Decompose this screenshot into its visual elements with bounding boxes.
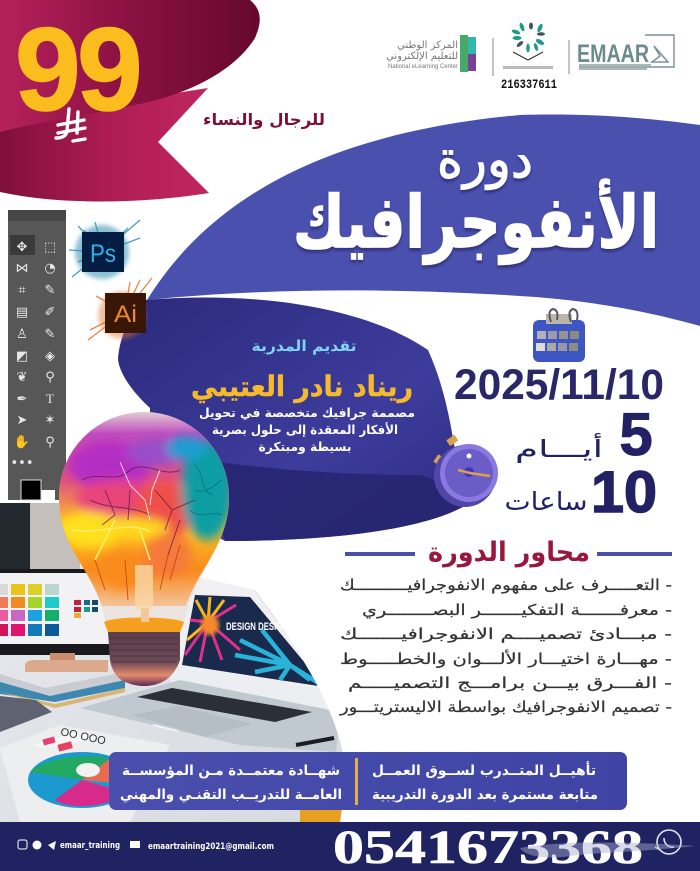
panel: tools palette: ❦ <box>17 370 27 385</box>
panel: tools palette: ✶ <box>45 413 55 428</box>
panel: tools palette: ◈ <box>45 349 55 364</box>
notebook with colour wheel <box>0 725 170 822</box>
icon: stopwatch <box>433 435 498 507</box>
icon: riyal symbol <box>56 109 85 141</box>
section heading: محاور الدورة <box>428 537 590 568</box>
footer contact: emaartraining2021@gmail.com <box>148 842 274 852</box>
panel: trainer <box>118 297 463 541</box>
duration hours <box>504 460 657 525</box>
icon: Illustrator <box>88 278 152 340</box>
panel: tools palette <box>8 210 66 502</box>
notebook with colour wheel: OO OOO <box>59 726 107 748</box>
trainer bio: بسيطة ومبتكرة <box>258 439 352 454</box>
trainer bio: مصممة جرافيك متخصصة في تحويل <box>199 405 415 420</box>
panel: tools palette: ✒ <box>17 392 27 407</box>
trainer bio <box>199 405 415 454</box>
duration hours: 10 <box>591 460 657 525</box>
icon: Photoshop <box>69 220 140 279</box>
audience text: للرجال والنساء <box>203 110 325 129</box>
panel: tools palette: ✎ <box>45 327 55 342</box>
section heading <box>345 537 672 568</box>
panel: tools palette: ◔ <box>44 261 56 276</box>
logo: national eLearning center: National eLearning Center <box>388 64 458 70</box>
footer contact <box>18 840 274 852</box>
poster <box>178 578 318 688</box>
panel: tools palette: ⋈ <box>16 261 28 276</box>
date: 2025/11/10 <box>454 361 664 409</box>
panel: title swoosh <box>147 115 700 326</box>
panel: tools palette: ✋ <box>14 434 30 450</box>
benefits right <box>372 761 598 803</box>
logo: national eLearning center: المركز الوطني <box>397 40 458 51</box>
duration days: 5 <box>619 401 653 468</box>
icon: calendar <box>533 309 585 362</box>
benefits right: متابعة مستمرة بعد الدورة التدريبية <box>372 787 598 803</box>
watermark <box>520 842 695 858</box>
course topics list <box>339 576 672 716</box>
panel: tools palette: T <box>46 391 54 406</box>
course topics list: - الفـــرق بيـــن برامـــج التصميـــــم <box>348 674 672 692</box>
panel: tools palette: ⌗ <box>18 283 26 298</box>
footer bar <box>0 822 700 871</box>
logo: national eLearning center: للتعليم الإلكتروني <box>386 51 458 62</box>
benefits left: شهــادة معتمــدة مـن المؤسســة <box>122 763 340 779</box>
trainer label: تقديم المدربة <box>252 337 356 355</box>
duration days <box>515 401 653 468</box>
panel: tools palette: ⚲ <box>45 435 55 450</box>
logo: EMAAR: EMAAR <box>577 40 649 68</box>
duration hours: ساعات <box>504 487 588 516</box>
illustration: brain light bulb <box>55 410 235 686</box>
course topics list: - مبـــادئ تصميــــم الانفوجرافيـــــــك <box>340 625 672 643</box>
laptop <box>80 664 340 752</box>
panel: tools palette: ⚲ <box>45 370 55 385</box>
logo: national eLearning center <box>386 35 476 72</box>
panel: tools palette: ✥ <box>17 240 28 255</box>
stack of devices <box>0 696 52 732</box>
duration days: أيـــام <box>515 433 603 463</box>
photo: design desk scene <box>0 500 350 830</box>
panel: tools palette: ➤ <box>17 413 28 428</box>
monitor <box>0 569 112 672</box>
course topics list: - تصميم الانفوجرافيك بواسطة الاليستريتـــور <box>339 698 672 716</box>
books <box>0 672 125 708</box>
logo: TVTC emblem with licence number <box>493 22 569 92</box>
panel: tools palette: ✎ <box>45 283 55 298</box>
trainer bio: الأفكار المعقدة إلى حلول بصرية <box>212 422 398 437</box>
panel: benefits box <box>109 752 627 810</box>
price number: 99 <box>15 4 143 136</box>
icon: whatsapp <box>655 830 681 854</box>
trainer name: ريناد نادر العتيبي <box>191 370 413 403</box>
panel: tools palette: ⬚ <box>44 240 56 255</box>
panel: tools palette: ▤ <box>16 305 28 320</box>
title: دورة <box>437 130 533 190</box>
panel: tools palette: ••• <box>10 456 34 471</box>
course topics list: - مهـــارة اختيـــار الألـــوان والخطـــــوط <box>340 649 672 668</box>
poster: DESIGN DESIGN <box>226 621 288 633</box>
panel: tools palette: ◩ <box>16 349 28 364</box>
panel: tools palette: ✐ <box>45 305 55 320</box>
title <box>293 130 659 265</box>
benefits left <box>120 763 342 803</box>
icon: Photoshop: Ps <box>90 240 116 268</box>
ribbon banner <box>0 0 260 202</box>
course topics list: - معرفـــــــة التفكيـــــــر البصــــــــري <box>362 601 672 620</box>
icon: Illustrator: Ai <box>114 301 137 328</box>
footer contact: emaar_training <box>60 841 120 851</box>
panel: tools palette: ♙ <box>16 327 28 342</box>
benefits right: تأهيــل المتــدرب لســوق العمــل <box>372 761 596 779</box>
licence number: 216337611 <box>501 78 557 92</box>
benefits left: العامــة للتدريــب التقنـي والمهني <box>120 787 342 803</box>
course topics list: - التعـــــرف على مفهوم الانفوجرافيــــــــــك <box>340 576 672 594</box>
